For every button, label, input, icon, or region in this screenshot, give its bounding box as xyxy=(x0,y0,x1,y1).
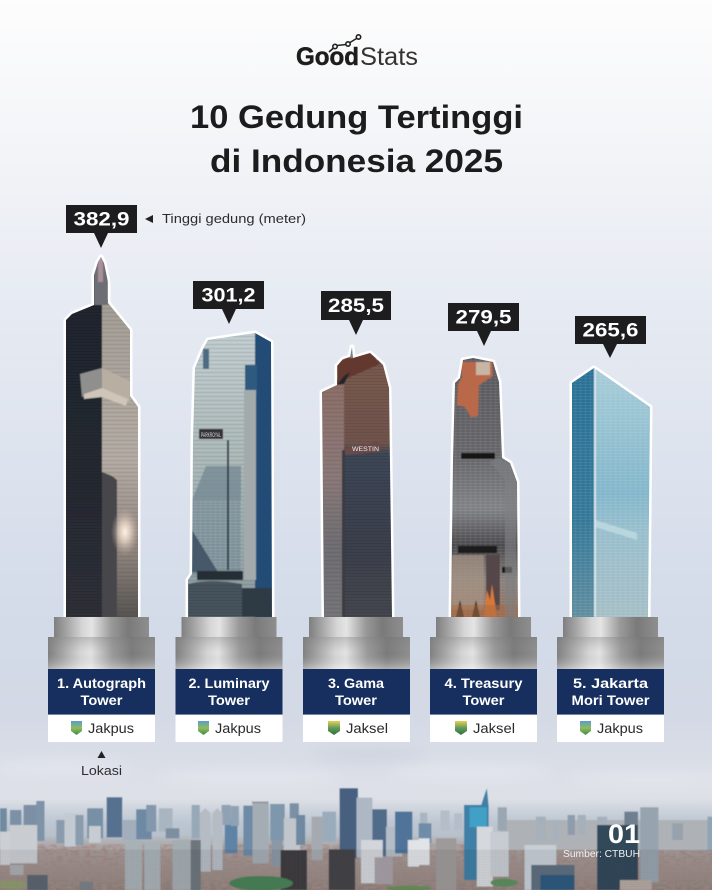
pedestal card 1: 1. Autograph xyxy=(57,676,146,691)
pedestal card 5 xyxy=(557,617,664,742)
tower 1: Autograph Tower xyxy=(60,250,140,620)
pedestal card 3: 3. Gama xyxy=(328,676,385,691)
source: Sumber: CTBUH xyxy=(563,849,640,860)
title xyxy=(190,99,523,179)
height label 2 xyxy=(193,281,264,324)
pedestal card 5: Mori Tower xyxy=(572,693,650,708)
pedestal card 3: Tower xyxy=(335,693,378,708)
pedestal card 5: Jakpus xyxy=(597,721,643,736)
pedestal card 1: Jakpus xyxy=(88,721,134,736)
tower 3: Gama Tower xyxy=(320,345,394,620)
pedestal card 3 xyxy=(303,617,410,742)
pedestal card 4: 4. Treasury xyxy=(444,676,523,691)
pedestal card 2 xyxy=(176,617,282,742)
annotation: location: Lokasi xyxy=(81,763,122,778)
tower 4: Treasury Tower xyxy=(448,355,520,620)
height label 1 xyxy=(66,205,137,248)
pedestal card 2: Tower xyxy=(208,693,251,708)
annotation: location xyxy=(81,751,122,778)
clouds xyxy=(0,749,712,787)
height label 3: 285,5 xyxy=(328,296,385,317)
pedestal card 4: Tower xyxy=(462,693,505,708)
pedestal card 5: 5. Jakarta xyxy=(573,676,649,691)
annotation: building height: Tinggi gedung (meter) xyxy=(162,211,306,226)
height label 5 xyxy=(575,316,646,358)
pedestal card 1 xyxy=(48,617,155,742)
pedestal card 4: Jaksel xyxy=(473,721,515,736)
height label 4 xyxy=(448,303,519,346)
city skyline photo xyxy=(0,770,712,890)
pedestal card 2: Jakpus xyxy=(215,721,261,736)
logo: GoodStats: Stats xyxy=(360,43,418,71)
logo: GoodStats xyxy=(296,35,418,71)
tower 3: Gama Tower: WESTIN xyxy=(352,446,379,453)
logo graph line icon xyxy=(329,35,361,52)
height label 5: 265,6 xyxy=(582,320,638,342)
pedestal card 3: Jaksel xyxy=(346,721,388,736)
height label 4: 279,5 xyxy=(456,308,512,328)
tower 5: Jakarta Mori Tower xyxy=(570,365,653,620)
title: 10 Gedung Tertinggi xyxy=(190,99,523,135)
height label 3 xyxy=(321,291,391,335)
height label 2: 301,2 xyxy=(202,286,256,306)
title: di Indonesia 2025 xyxy=(210,143,503,179)
page number: 01 xyxy=(608,819,640,849)
tower 2: Luminary Tower: PARKROYAL xyxy=(201,433,221,439)
height label 1: 382,9 xyxy=(74,210,130,230)
logo: GoodStats: Good xyxy=(296,43,359,71)
pedestal card 4 xyxy=(430,617,537,742)
pedestal card 1: Tower xyxy=(80,693,123,708)
pedestal card 2: 2. Luminary xyxy=(188,676,270,691)
tower 2: Luminary Tower xyxy=(186,330,274,620)
